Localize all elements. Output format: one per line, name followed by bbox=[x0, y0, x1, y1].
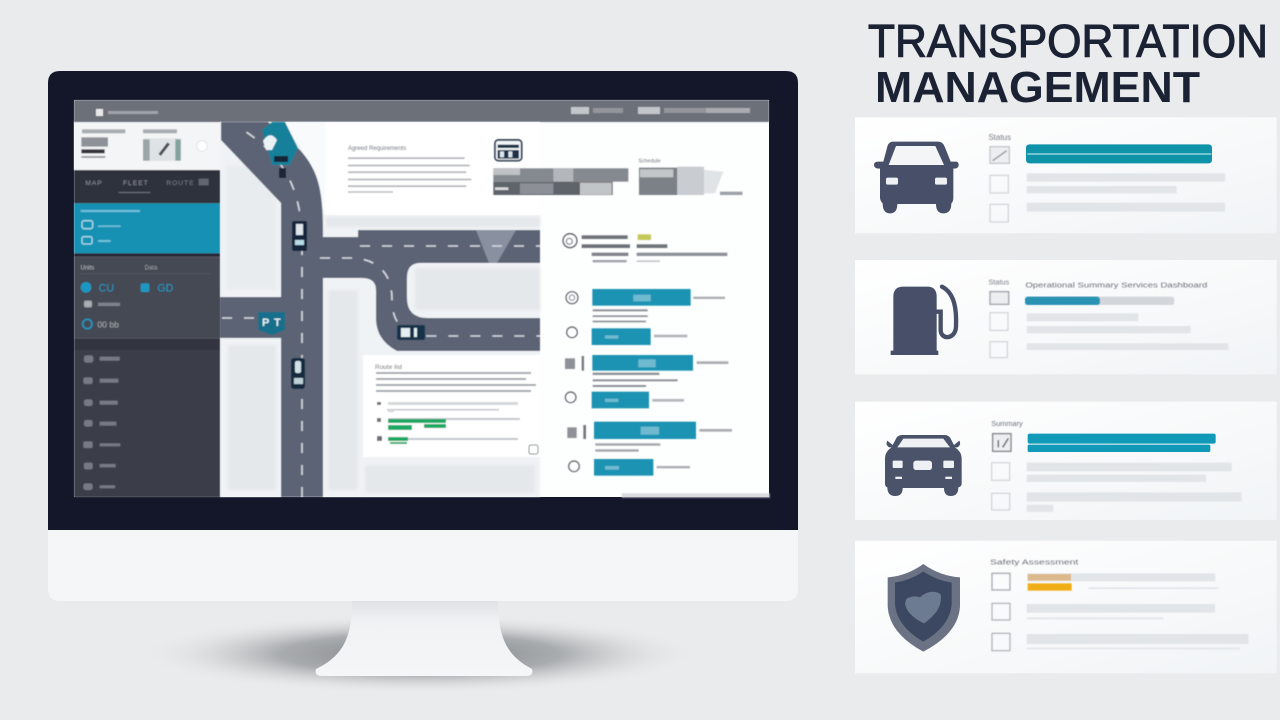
white info block bbox=[325, 122, 540, 215]
title line 2: MANAGEMENT bbox=[875, 63, 1200, 112]
marker: vehicle 2: P bbox=[262, 317, 269, 329]
title line 1: TRANSPORTATION bbox=[868, 15, 1268, 67]
bar row 1 bbox=[566, 289, 725, 322]
progress bar bbox=[1028, 434, 1216, 452]
route map bbox=[220, 122, 540, 497]
bar row 5 bbox=[567, 422, 732, 452]
monitor chin bbox=[48, 528, 798, 601]
text lines bbox=[1027, 604, 1248, 649]
progress bar bbox=[1028, 573, 1218, 591]
icon: fuel pump bbox=[891, 287, 956, 355]
text lines bbox=[1027, 313, 1228, 350]
fuel heading: Operational Summary Services Dashboard bbox=[1025, 283, 1207, 290]
text block: overview: Agreed Requirements bbox=[348, 146, 406, 152]
bar row 4 bbox=[565, 392, 684, 408]
top white summary panel bbox=[74, 122, 221, 170]
city blocks bbox=[226, 165, 540, 493]
monitor bezel bbox=[48, 71, 798, 530]
stand shadow bbox=[140, 614, 700, 694]
checklist bbox=[988, 277, 1009, 358]
text lines bbox=[1027, 463, 1242, 512]
icon: shield bbox=[888, 564, 960, 652]
marker: vehicle 2 bbox=[258, 312, 285, 335]
status panel: Units bbox=[81, 265, 94, 271]
icon: car front bbox=[874, 142, 959, 213]
marker: vehicle 3 bbox=[291, 358, 305, 389]
icon: badge bbox=[495, 140, 522, 161]
checklist bbox=[991, 419, 1023, 510]
marker: vehicle 2: T bbox=[274, 317, 281, 329]
screen bbox=[74, 100, 770, 498]
status panel: 00 bb bbox=[97, 320, 119, 330]
right data column bbox=[348, 140, 770, 498]
status panel: GD bbox=[157, 282, 174, 294]
top bar bbox=[74, 100, 769, 122]
text lines bbox=[1027, 173, 1225, 212]
sidebar tabs: MAP bbox=[85, 180, 103, 187]
photo strip 1 bbox=[493, 168, 628, 195]
progress bar bbox=[1026, 144, 1212, 163]
photo strip 2 bbox=[638, 158, 743, 195]
title bbox=[868, 15, 1268, 112]
photo strip 2: Schedule bbox=[638, 158, 661, 164]
sidebar list bbox=[74, 350, 221, 497]
icon: sports car bbox=[885, 435, 962, 496]
progress bar bbox=[1025, 297, 1174, 305]
checklist: Safety Assessment bbox=[990, 558, 1078, 567]
bar chart bbox=[565, 289, 732, 476]
status panel: Data bbox=[145, 265, 158, 271]
sidebar and header bbox=[74, 122, 221, 497]
roads bbox=[220, 122, 540, 497]
panel: safety bbox=[855, 541, 1277, 673]
marker: vehicle 1 bbox=[292, 221, 307, 251]
checklist: Status bbox=[988, 133, 1011, 142]
panel: fleet bbox=[855, 402, 1277, 520]
sidebar tabs bbox=[74, 170, 221, 203]
text block: overview bbox=[348, 146, 471, 193]
route details card bbox=[363, 355, 540, 457]
monitor stand bbox=[316, 600, 532, 676]
checklist bbox=[988, 133, 1011, 222]
vehicle markers bbox=[258, 122, 425, 389]
monitor bbox=[48, 71, 798, 676]
marker: vehicle 4 bbox=[397, 325, 425, 340]
checklist bbox=[990, 558, 1078, 651]
bar row 6 bbox=[569, 459, 690, 476]
legend block bbox=[563, 234, 727, 262]
marker: teal route pin bbox=[262, 122, 298, 178]
bar row 3 bbox=[565, 355, 728, 387]
sidebar tabs: ROUTE bbox=[166, 180, 195, 187]
status panel: CU bbox=[99, 282, 114, 294]
bar row 2 bbox=[567, 327, 687, 345]
panel: vehicles bbox=[855, 117, 1277, 233]
active teal panel bbox=[74, 203, 221, 253]
route details card: Route list bbox=[375, 364, 402, 371]
checklist: Status bbox=[988, 277, 1009, 286]
panel: fuel bbox=[855, 260, 1277, 374]
checklist: Summary bbox=[991, 419, 1023, 428]
lane dashes bbox=[222, 128, 540, 497]
sidebar tabs: FLEET bbox=[123, 180, 149, 187]
status panel bbox=[74, 257, 221, 338]
